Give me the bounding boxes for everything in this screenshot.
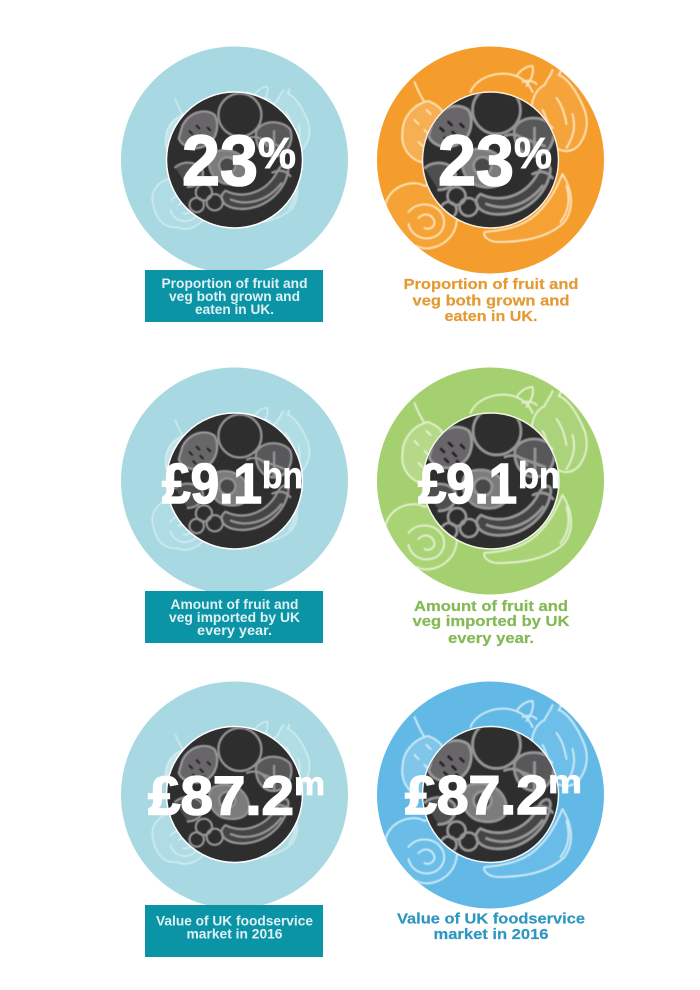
figure: 23%: [182, 122, 296, 201]
panel: £9.1bn imported, teal: [121, 368, 348, 643]
caption: eaten in UK.: [444, 308, 538, 325]
caption: Value of UK foodservice: [397, 910, 585, 928]
caption: market in 2016: [434, 926, 548, 943]
caption: Amount of fruit and: [414, 598, 568, 615]
figure: 23%: %: [258, 129, 296, 178]
caption box: Proportion of fruit and: [162, 276, 308, 291]
panel: 23% grown and eaten in UK, teal: [121, 46, 348, 322]
dark fruit photo circle: [166, 92, 302, 228]
caption box: market in 2016: [186, 926, 283, 942]
caption box: [145, 905, 323, 957]
caption: Proportion of fruit and: [404, 276, 578, 293]
figure: 23%: %: [514, 129, 552, 178]
caption box: every year.: [197, 623, 272, 638]
caption box: eaten in UK.: [195, 302, 274, 317]
figure: £9.1bn: £9.1: [418, 452, 517, 516]
green circle with fruit doodles: [377, 368, 604, 594]
caption: [412, 598, 570, 647]
dark fruit photo circle: [423, 407, 559, 549]
dark fruit photo circle: [166, 413, 302, 549]
caption box: [145, 591, 323, 643]
caption: every year.: [448, 630, 534, 647]
figure: 23%: [438, 122, 552, 201]
figure: 23%: 23: [182, 122, 258, 201]
teal circle with fruit doodles: [121, 682, 348, 908]
caption: [404, 276, 578, 325]
dark fruit photo circle: [422, 86, 558, 228]
figure: £87.2m: m: [294, 765, 325, 802]
figure: £9.1bn: bn: [518, 455, 560, 496]
caption box: [145, 270, 323, 322]
teal circle with fruit doodles: [121, 368, 348, 594]
caption box: Amount of fruit and: [170, 597, 298, 612]
dark fruit photo circle: [422, 720, 558, 862]
orange circle with fruit doodles: [377, 46, 604, 274]
blue circle with fruit doodles: [377, 682, 604, 908]
figure: 23%: 23: [438, 122, 514, 201]
figure: £9.1bn: £9.1: [162, 452, 262, 516]
caption: veg both grown and: [412, 292, 570, 310]
caption box: veg both grown and: [169, 289, 300, 304]
caption: veg imported by UK: [412, 613, 570, 630]
dark fruit photo circle: [166, 726, 302, 862]
figure: £87.2m: m: [548, 763, 582, 800]
figure: £9.1bn: bn: [262, 455, 303, 496]
panel: 23% grown and eaten in UK, orange: [377, 46, 604, 325]
caption: [397, 910, 585, 943]
panel: £87.2m foodservice market, teal: [121, 682, 348, 957]
figure: £87.2m: £87.2: [405, 764, 548, 826]
panel: £87.2m foodservice market, blue: [377, 682, 604, 943]
figure: £87.2m: £87.2: [148, 764, 294, 826]
caption box: Value of UK foodservice: [156, 914, 313, 928]
teal circle with fruit doodles: [121, 46, 348, 274]
panel: £9.1bn imported, green: [377, 368, 604, 647]
caption box: veg imported by UK: [169, 610, 300, 625]
